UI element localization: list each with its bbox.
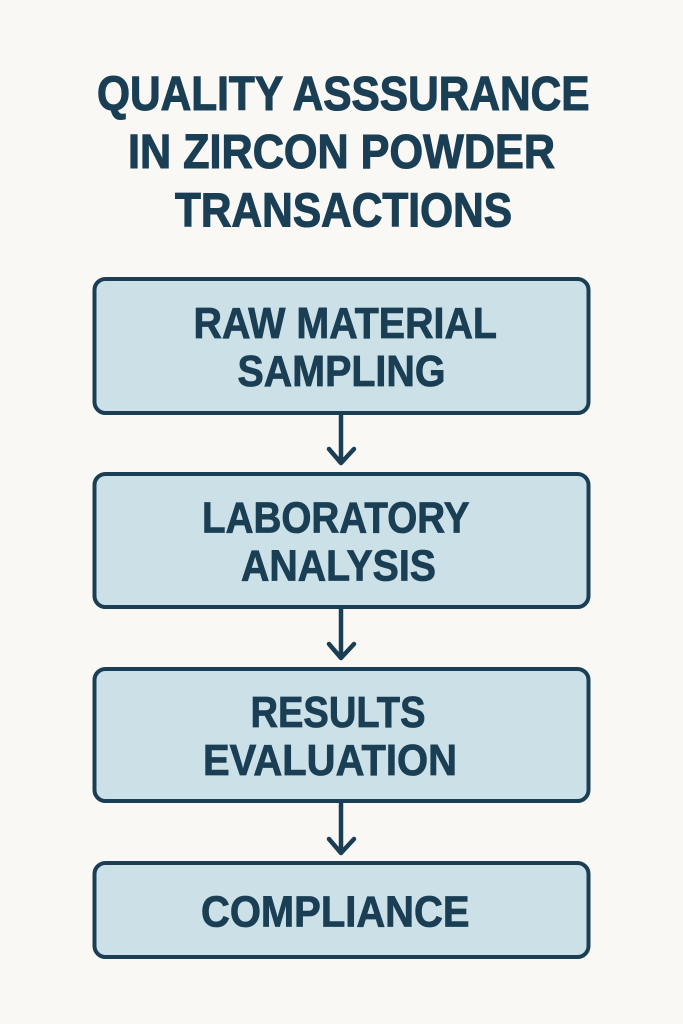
panel: laboratory analysis: ANALYSIS: [241, 542, 436, 590]
title: IN ZIRCON POWDER: [128, 126, 555, 179]
panel: results evaluation: [94, 669, 588, 801]
title: [97, 68, 590, 238]
panel: results evaluation: RESULTS: [250, 689, 426, 737]
panel: compliance: [94, 863, 588, 957]
panel: compliance: COMPLIANCE: [201, 888, 470, 936]
panel: raw material sampling: SAMPLING: [238, 348, 446, 396]
title: TRANSACTIONS: [175, 184, 512, 238]
panel: laboratory analysis: LABORATORY: [202, 494, 470, 542]
panel: results evaluation: EVALUATION: [203, 737, 457, 785]
panel: raw material sampling: [94, 279, 588, 413]
arrow: analysis to evaluation: [329, 609, 354, 658]
panel: raw material sampling: RAW MATERIAL: [194, 300, 497, 348]
panel: laboratory analysis: [94, 474, 588, 607]
title: QUALITY ASSSURANCE: [97, 68, 590, 121]
arrow: sampling to analysis: [329, 415, 354, 463]
arrow: evaluation to compliance: [329, 803, 354, 853]
